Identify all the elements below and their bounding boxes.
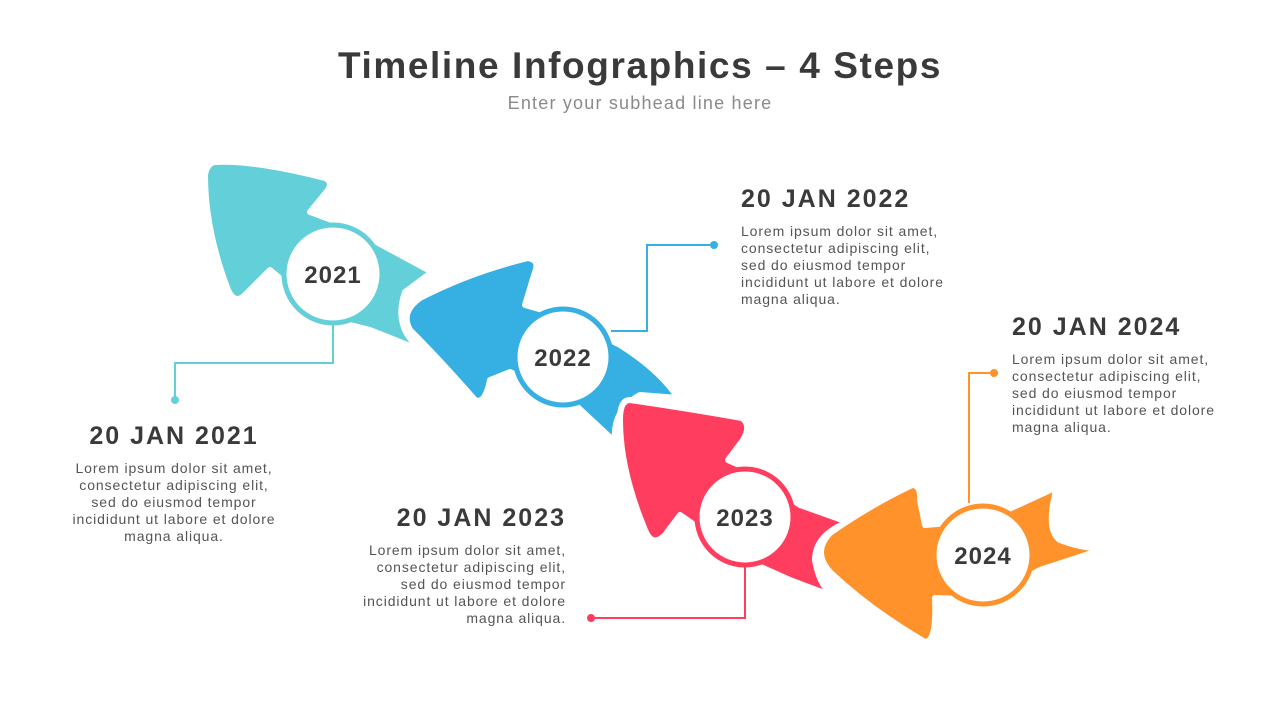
text block 2024: Lorem ipsum dolor sit amet, (1012, 351, 1209, 367)
text block 2021: Lorem ipsum dolor sit amet, (75, 460, 273, 476)
text block 2022: consectetur adipiscing elit, (741, 240, 930, 256)
text block 2024 (1012, 313, 1215, 435)
text block 2022 (741, 185, 944, 307)
text block 2021: magna aliqua. (124, 528, 224, 544)
text block 2024: magna aliqua. (1012, 419, 1112, 435)
arrow 2021: 2021 (304, 262, 362, 289)
text block 2022: magna aliqua. (741, 291, 841, 307)
text block 2023: 20 JAN 2023 (397, 504, 566, 532)
text block 2022: 20 JAN 2022 (741, 185, 910, 213)
text block 2024: 20 JAN 2024 (1012, 313, 1181, 341)
arrow 2024 (821, 485, 1104, 642)
text block 2024: sed do eiusmod tempor (1012, 385, 1177, 401)
arrow 2023: 2023 (716, 505, 774, 532)
arrow 2023 (620, 400, 848, 598)
text block 2023: consectetur adipiscing elit, (377, 559, 566, 575)
text block 2024: consectetur adipiscing elit, (1012, 368, 1201, 384)
text block 2023: Lorem ipsum dolor sit amet, (369, 542, 566, 558)
text block 2023: magna aliqua. (466, 610, 566, 626)
connector dots (171, 241, 998, 622)
arrow 2021 (205, 162, 432, 352)
text block 2021: consectetur adipiscing elit, (79, 477, 269, 493)
text block 2022: Lorem ipsum dolor sit amet, (741, 223, 938, 239)
arrow 2022 (407, 258, 678, 442)
text block 2022: sed do eiusmod tempor (741, 257, 906, 273)
connector lines (175, 245, 994, 618)
text block 2021: 20 JAN 2021 (89, 422, 259, 450)
arrow 2024: 2024 (954, 543, 1012, 570)
arrow 2022: 2022 (534, 345, 592, 372)
text block 2023 (363, 504, 566, 626)
text block 2022: incididunt ut labore et dolore (741, 274, 944, 290)
text block 2021 (73, 422, 275, 544)
text block 2024: incididunt ut labore et dolore (1012, 402, 1215, 418)
text block 2021: sed do eiusmod tempor (91, 494, 257, 510)
text block 2023: incididunt ut labore et dolore (363, 593, 566, 609)
text block 2023: sed do eiusmod tempor (401, 576, 566, 592)
title: Timeline Infographics – 4 Steps (338, 45, 942, 86)
subhead: Enter your subhead line here (508, 93, 772, 113)
text block 2021: incididunt ut labore et dolore (73, 511, 275, 527)
